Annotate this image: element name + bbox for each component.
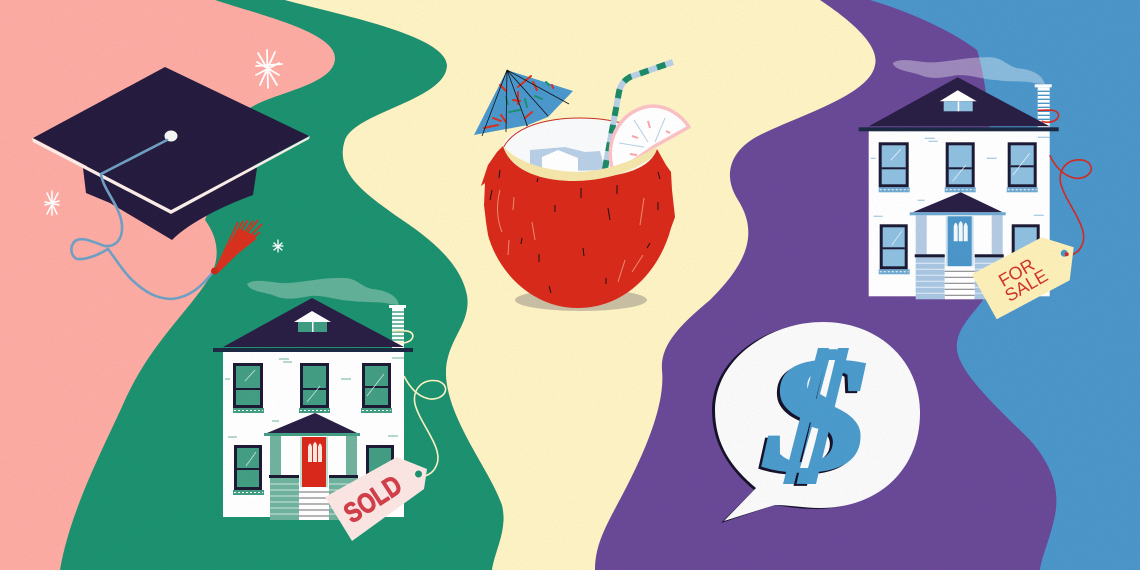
brick base bbox=[915, 254, 1004, 299]
dollar glyph: $ bbox=[762, 324, 869, 506]
smoke bbox=[247, 278, 399, 305]
band: cream wave bbox=[285, 0, 900, 570]
roof bbox=[869, 77, 1050, 126]
price tag bbox=[325, 457, 427, 541]
cap tassel bbox=[211, 220, 262, 274]
dormer bbox=[294, 311, 331, 332]
coconut drink bbox=[474, 62, 689, 311]
roof bbox=[223, 298, 404, 347]
ice bbox=[530, 147, 605, 172]
dollar shadow: $ bbox=[759, 326, 866, 508]
steps bbox=[945, 266, 975, 299]
sparkle: small left bbox=[45, 191, 59, 215]
porch roof bbox=[267, 413, 357, 433]
steps bbox=[299, 487, 329, 520]
band: blue wave bbox=[870, 0, 1140, 570]
sparkle: large bbox=[256, 50, 282, 88]
cap white edge bbox=[32, 136, 310, 214]
string bbox=[392, 331, 446, 476]
brick base bbox=[269, 475, 358, 520]
porch beam bbox=[264, 433, 360, 436]
porch roof bbox=[913, 192, 1003, 212]
umbrella stick bbox=[507, 70, 542, 167]
citrus wedge bbox=[610, 106, 689, 170]
straw bbox=[605, 62, 673, 169]
window bbox=[945, 142, 976, 192]
dollar gaps bbox=[800, 360, 837, 468]
wall brick marks bbox=[871, 137, 1050, 230]
chimney bbox=[389, 305, 406, 348]
wall brick marks bbox=[225, 358, 404, 451]
door bbox=[946, 216, 974, 267]
cap board bbox=[33, 67, 309, 210]
window bbox=[879, 142, 910, 192]
walls bbox=[869, 130, 1050, 296]
band: green wave bbox=[60, 0, 504, 570]
porch beam bbox=[910, 212, 1006, 215]
window bbox=[1007, 142, 1038, 192]
window bbox=[366, 445, 394, 475]
walls bbox=[223, 351, 404, 517]
tag text: FOR bbox=[995, 255, 1038, 291]
band: purple wave bbox=[595, 0, 1100, 570]
husk highlights bbox=[498, 190, 644, 282]
house: for sale bbox=[859, 57, 1091, 319]
straw stripes bbox=[605, 62, 673, 169]
window bbox=[879, 224, 910, 274]
sparkle: tiny bbox=[273, 240, 283, 252]
eaves bbox=[859, 127, 1059, 131]
door bbox=[300, 437, 328, 488]
window bbox=[233, 445, 264, 495]
tassel knot bbox=[211, 268, 218, 274]
window bbox=[299, 363, 330, 413]
cocktail umbrella bbox=[474, 70, 573, 136]
porch pillars bbox=[270, 436, 357, 475]
cap button bbox=[164, 130, 178, 142]
cap base bbox=[83, 130, 257, 240]
dormer bbox=[940, 90, 977, 111]
husk marks bbox=[490, 170, 660, 293]
house: sold bbox=[213, 278, 446, 541]
string bbox=[1038, 110, 1091, 255]
window bbox=[361, 363, 392, 413]
dollar sign bbox=[759, 324, 869, 508]
shadow bbox=[515, 289, 647, 311]
tag text: SALE bbox=[1001, 265, 1051, 306]
bubble body bbox=[715, 322, 920, 521]
window bbox=[233, 363, 264, 413]
coconut flesh rim bbox=[503, 146, 657, 181]
chimney bbox=[1035, 84, 1052, 127]
dollar bars bbox=[783, 348, 849, 484]
speech bubble bbox=[712, 322, 920, 523]
tag text: SOLD bbox=[339, 470, 408, 529]
window bbox=[1012, 224, 1040, 254]
bubble shadow bbox=[712, 323, 918, 523]
rim line bbox=[503, 118, 650, 148]
eaves bbox=[213, 348, 413, 352]
smoke bbox=[893, 57, 1045, 84]
porch pillars bbox=[916, 215, 1003, 254]
cap cord bbox=[71, 140, 213, 299]
graduation cap bbox=[32, 67, 310, 299]
coconut shell bbox=[481, 146, 675, 308]
coconut interior bbox=[503, 118, 657, 178]
price tag bbox=[972, 237, 1074, 319]
